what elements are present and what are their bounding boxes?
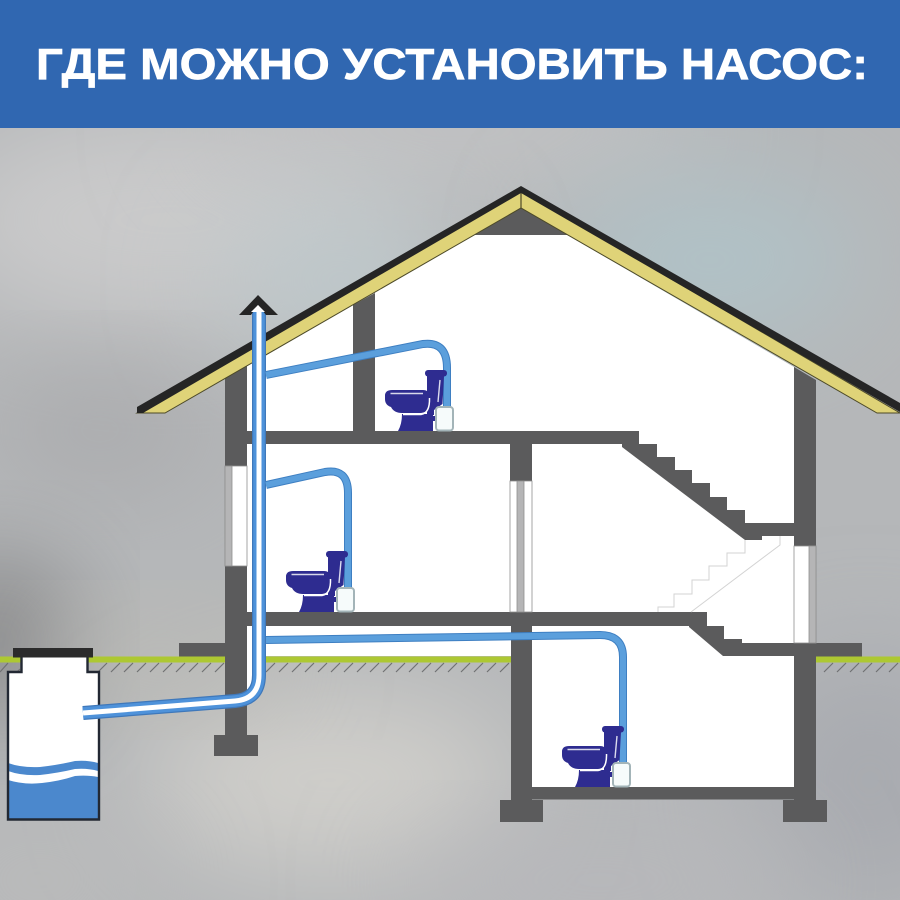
window: left wall [225, 466, 247, 566]
water [8, 761, 98, 819]
ground line [0, 656, 900, 672]
title: ГДЕ МОЖНО УСТАНОВИТЬ НАСОС: [36, 40, 868, 89]
house [137, 186, 900, 822]
septic tank [8, 648, 99, 820]
lower stairs [689, 612, 794, 656]
branch pipe: first floor [266, 471, 348, 589]
tank lid [13, 648, 93, 658]
gable [473, 208, 570, 235]
toilet and pump: attic [385, 370, 453, 431]
branch pipe: attic [266, 344, 447, 408]
roof [137, 186, 900, 413]
house interior [247, 208, 794, 787]
main pipe [83, 311, 259, 713]
faint stair outline [658, 536, 780, 612]
vent arrow [239, 295, 278, 315]
toilet and pump: basement [562, 726, 630, 787]
toilet and pump: first floor [286, 551, 354, 612]
branch pipe: basement [266, 635, 623, 764]
window: center wall [510, 481, 532, 612]
upper stairs [622, 431, 794, 540]
header band [0, 0, 900, 128]
walls and floors [179, 293, 862, 822]
window: right wall [794, 546, 816, 643]
